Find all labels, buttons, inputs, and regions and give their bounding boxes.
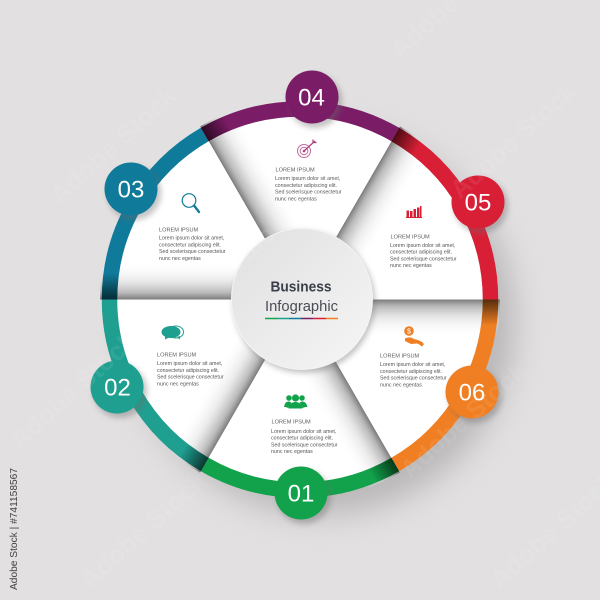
icon: hand with coin: $: [407, 328, 411, 336]
panel 06 text: [380, 354, 447, 388]
icon: chat bubbles: [162, 326, 184, 340]
panel 02 text: LOREM IPSUM: [157, 352, 197, 358]
wheel drop shadow: [130, 130, 514, 514]
panel 05 text: Lorem ipsum dolor sit amet,: [390, 243, 455, 249]
watermark: Adobe Stock: [394, 355, 533, 484]
icon: target: [298, 140, 316, 158]
panel 04 text: LOREM IPSUM: [276, 168, 315, 174]
panel 05 text: Sed scelerisque consectetur: [390, 256, 457, 262]
panel 06 text: Sed scelerisque consectetur: [380, 376, 447, 382]
badge 02: 02: [104, 374, 131, 402]
panel 03 text: consectetur adipiscing elit.: [159, 242, 221, 248]
ring segment 04: [205, 52, 395, 217]
icon: magnifier: [182, 194, 199, 212]
panel 02 text: [157, 352, 224, 388]
icon: hand with coin: [404, 326, 424, 346]
center title: Business: [270, 278, 332, 296]
panel 02 text: nunc nec egentas: [157, 382, 199, 388]
ring segment 01: [205, 382, 395, 547]
panel 04 text: nunc nec egentas: [275, 196, 317, 202]
panel 05 text: consectetur adipiscing elit.: [390, 250, 452, 256]
panel 02 text: Sed scelerisque consectetur: [157, 374, 224, 380]
badge 05: [452, 176, 508, 233]
badge 03: [104, 162, 161, 220]
panel 06 text: Lorem ipsum dolor sit amet,: [380, 362, 445, 368]
panel 01 text: consectetur adipiscing elit.: [271, 436, 333, 442]
badge 01: [274, 466, 331, 524]
badge 06: [446, 366, 502, 423]
badge 06: 06: [459, 380, 485, 406]
watermark: Adobe Stock: [4, 325, 143, 454]
panel 06 text: LOREM IPSUM: [380, 354, 420, 360]
panel 04 text: Sed scelerisque consectetur: [275, 190, 342, 196]
panel 03 text: nunc nec egentas: [159, 256, 201, 262]
panel 04 text: [275, 168, 342, 202]
panel 05 text: LOREM IPSUM: [390, 234, 430, 240]
center circle: [232, 228, 372, 370]
badge 01: 01: [288, 480, 314, 508]
panel 02 text: Lorem ipsum dolor sit amet,: [157, 361, 222, 367]
panel 04 text: Lorem ipsum dolor sit amet,: [275, 176, 340, 182]
panel 01 text: Sed scelerisque consectetur: [271, 442, 338, 448]
panel 01 text: [271, 420, 338, 455]
panel 02 text: consectetur adipiscing elit.: [157, 368, 219, 374]
sector shadows: [100, 106, 500, 493]
panel 05 text: nunc nec egentas: [390, 263, 432, 269]
watermark: Adobe Stock: [444, 75, 583, 204]
panel 01 text: LOREM IPSUM: [272, 420, 311, 426]
badge 04: 04: [298, 84, 325, 112]
wheel base: [115, 114, 485, 484]
badge 02: [90, 360, 147, 418]
panel 03 text: LOREM IPSUM: [159, 228, 199, 234]
watermark: Adobe Stock: [74, 465, 213, 594]
center colour rule: [265, 318, 338, 320]
badge 04: [286, 70, 342, 128]
panel 01 text: nunc nec egentas: [271, 449, 313, 455]
badge 03: 03: [118, 176, 144, 204]
panel 03 text: Sed scelerisque consectetur: [159, 249, 226, 255]
badge 05: 05: [465, 190, 491, 216]
icon: bar chart: [406, 206, 422, 218]
panel 03 text: Lorem ipsum dolor sit amet,: [159, 236, 224, 242]
ring segment 02: [62, 299, 252, 464]
panel 06 text: nunc nec egentas: [380, 382, 422, 388]
panel 06 text: consectetur adipiscing elit.: [380, 369, 442, 375]
ring segment 05: [348, 135, 538, 300]
center circle shadow: [233, 231, 375, 373]
panel 05 text: [390, 234, 457, 269]
coloured ring: [62, 52, 538, 547]
stock id label: Adobe Stock | #741158567: [8, 468, 20, 590]
ring segment 03: [110, 135, 205, 300]
icon: people: [284, 394, 308, 408]
panel 03 text: [159, 228, 226, 262]
watermark: Adobe Stock: [224, 145, 363, 274]
panel 01 text: Lorem ipsum dolor sit amet,: [271, 429, 336, 435]
watermark: Adobe Stock: [44, 80, 183, 209]
ring segment 06: [395, 300, 490, 464]
center subtitle: Infographic: [265, 298, 338, 315]
panel 04 text: consectetur adipiscing elit.: [275, 183, 337, 189]
